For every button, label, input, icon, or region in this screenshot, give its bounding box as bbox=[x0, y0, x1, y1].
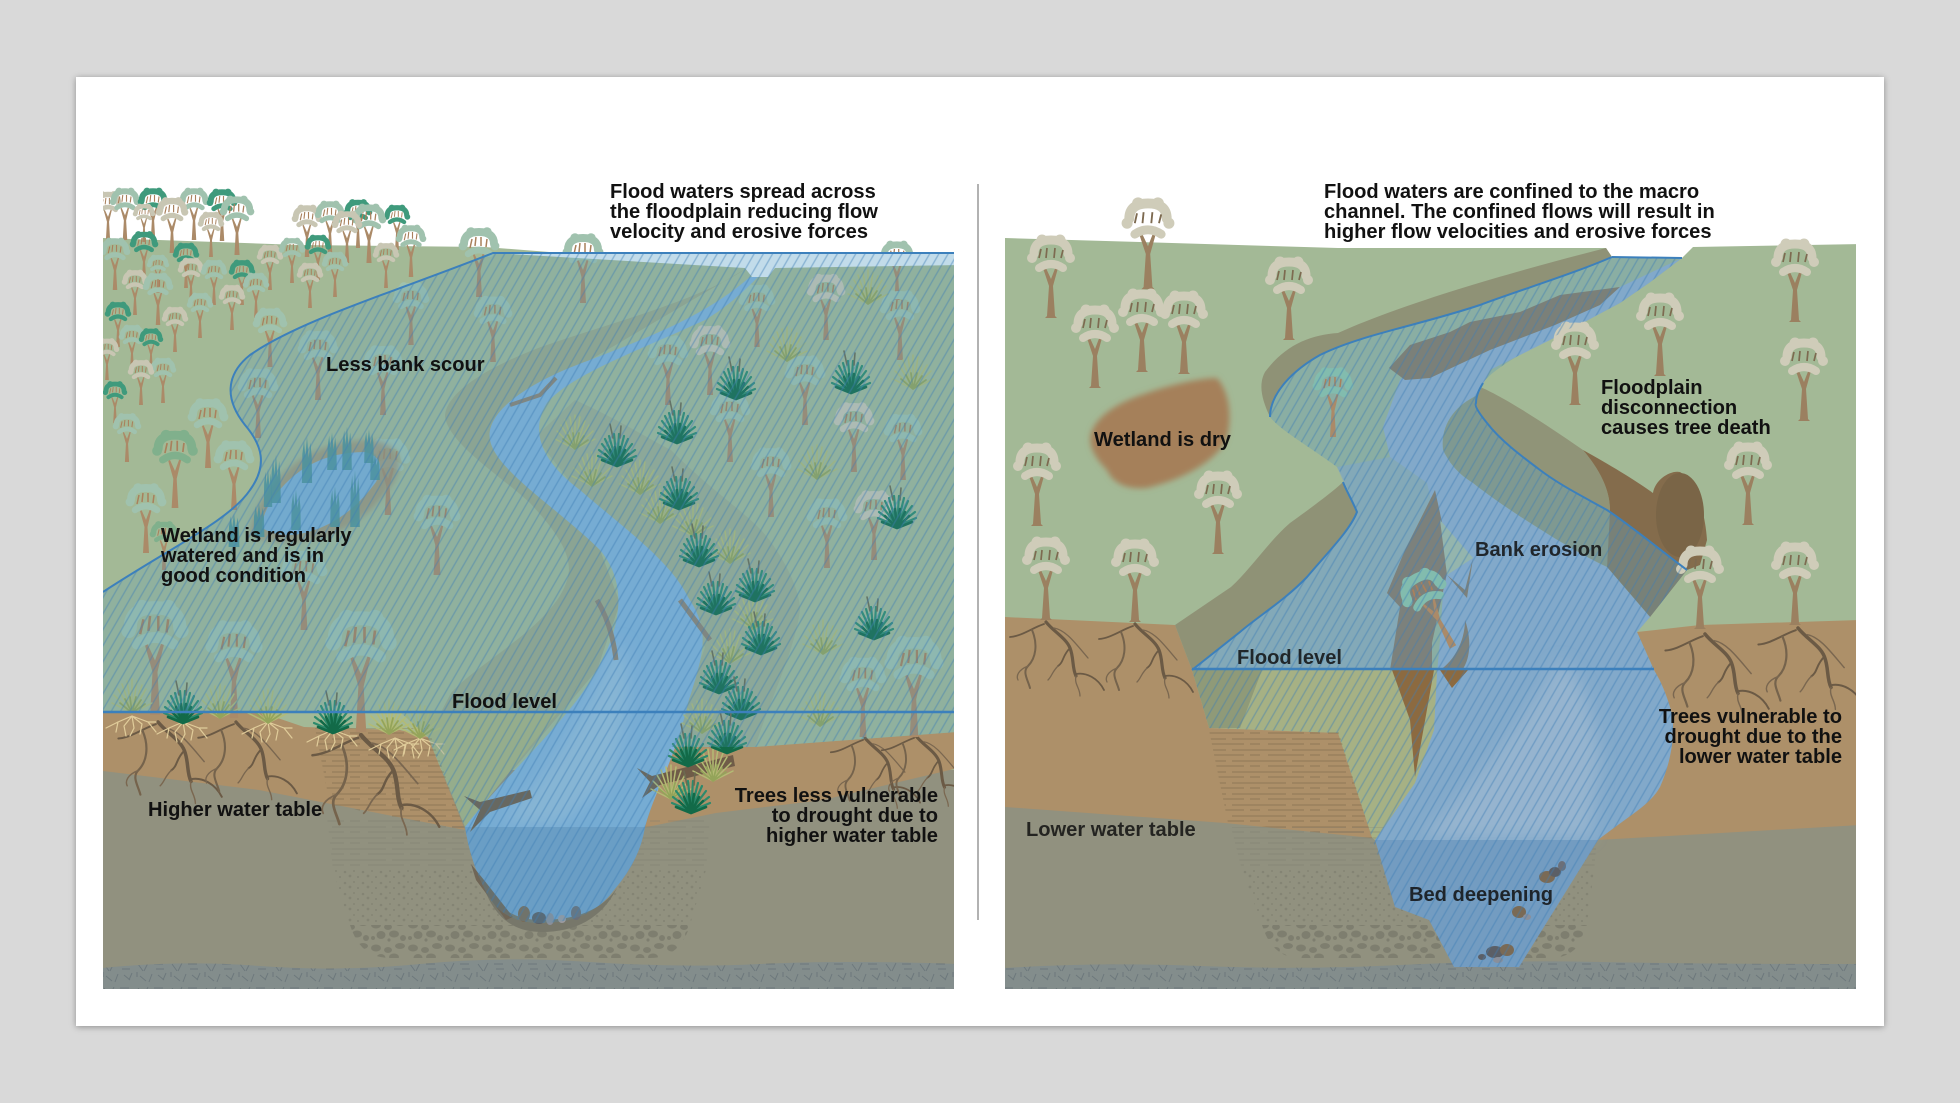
label: flood waters confined: higher flow velocities and erosive forces bbox=[1324, 221, 1712, 243]
wetland pool bbox=[250, 440, 399, 542]
cliff shade near terrace bbox=[1192, 670, 1262, 728]
bed mud rim bbox=[484, 888, 617, 932]
eroded left bank lower bbox=[1175, 482, 1357, 670]
label: wetland watered: Wetland is regularly bbox=[161, 525, 352, 547]
label: lower water table: Lower water table bbox=[1026, 819, 1196, 841]
gravel bed under channel bbox=[1231, 827, 1598, 958]
pale flow in river bbox=[511, 654, 628, 825]
roots left bbox=[106, 716, 444, 835]
label: flood waters spread: Flood waters spread across bbox=[610, 181, 876, 203]
eroded right bank bbox=[1443, 387, 1610, 567]
soil strata lines bbox=[315, 728, 465, 830]
floodplain ground bbox=[103, 238, 958, 780]
island small wedge bbox=[1447, 558, 1473, 598]
panel: confined macro channel bbox=[1005, 197, 1862, 989]
label: wetland dry: Wetland is dry bbox=[1094, 429, 1232, 451]
soil strata lines bbox=[1209, 730, 1372, 838]
flood overlay bbox=[1192, 257, 1687, 967]
infographic bbox=[103, 183, 1856, 989]
label: bank erosion: Bank erosion bbox=[1475, 539, 1602, 561]
bed rocks bbox=[1478, 861, 1566, 963]
exposed dark bar upper bbox=[1389, 287, 1620, 380]
blue left lower water bbox=[1192, 457, 1435, 670]
label: wetland watered: watered and is in bbox=[160, 545, 324, 567]
flood level line bbox=[103, 711, 958, 713]
grey subsoil bbox=[103, 770, 958, 989]
label: flood waters spread: velocity and erosive forces bbox=[610, 221, 868, 243]
floodplain trees under the flood bbox=[238, 241, 922, 630]
wetland in good condition bbox=[229, 427, 399, 547]
island pale lens bbox=[1440, 520, 1473, 575]
label: trees vulnerable: lower water table bbox=[1679, 746, 1842, 768]
bank band right of river bbox=[535, 400, 800, 747]
bedrock band bbox=[103, 959, 958, 989]
label: trees vulnerable: Trees vulnerable to bbox=[1659, 706, 1842, 728]
fallen logs bbox=[464, 378, 735, 920]
foreground tussocks bbox=[112, 679, 840, 813]
card bbox=[76, 77, 1884, 1026]
eroded left bank upper bbox=[1261, 248, 1612, 417]
wetland reeds bbox=[229, 427, 380, 547]
label: floodplain disconnection: Floodplain bbox=[1601, 377, 1703, 399]
foreground trees on the soil bbox=[121, 600, 944, 737]
label: floodplain disconnection: disconnection bbox=[1601, 397, 1737, 419]
flood extent right line bbox=[1475, 383, 1687, 570]
right soil block bbox=[1598, 620, 1860, 840]
label: trees less vulnerable: higher water table bbox=[766, 825, 938, 847]
label: flood waters confined: channel. The confined flows will result in bbox=[1324, 201, 1715, 223]
bedrock band bbox=[1005, 961, 1856, 989]
label: flood waters confined: Flood waters are confined to the macro bbox=[1324, 181, 1699, 203]
brown soil left bbox=[103, 712, 465, 830]
slump blob bbox=[1656, 473, 1704, 557]
floodplain ground bbox=[1005, 238, 1860, 830]
flood water overlay bbox=[103, 253, 958, 923]
labels: left panel bbox=[148, 181, 938, 847]
flood extent line bbox=[103, 253, 958, 592]
trees on right floodplain bbox=[1013, 197, 1828, 629]
grey subsoil bbox=[1005, 806, 1856, 968]
labels: right panel bbox=[1026, 181, 1842, 906]
flood level line bbox=[1192, 668, 1654, 670]
water channel bbox=[1375, 258, 1682, 840]
olive bank below flood level bbox=[420, 712, 558, 827]
label: flood level right: Flood level bbox=[1237, 647, 1342, 669]
label: trees vulnerable: drought due to the bbox=[1665, 726, 1842, 748]
label: wetland watered: good condition bbox=[161, 565, 306, 587]
divider bbox=[977, 184, 979, 920]
river channel bbox=[465, 277, 758, 827]
gravel bed under channel bbox=[327, 817, 710, 958]
label: trees less vulnerable: to drought due to bbox=[772, 805, 938, 827]
panel: connected floodplain bbox=[94, 188, 971, 989]
brown soil right bbox=[642, 732, 958, 828]
label: flood level left: Flood level bbox=[452, 691, 557, 713]
roots of right panel trees bbox=[1010, 622, 1862, 715]
channel water below the soil line bbox=[465, 827, 645, 923]
label: flood waters spread: the floodplain reducing flow bbox=[610, 201, 878, 223]
island brown tip bbox=[1440, 670, 1468, 688]
label: floodplain disconnection: causes tree death bbox=[1601, 417, 1771, 439]
label: higher water table: Higher water table bbox=[148, 799, 322, 821]
flood top line bbox=[1612, 257, 1682, 258]
dry wetland bbox=[1090, 378, 1230, 488]
roots right bbox=[830, 736, 954, 809]
mid channel island bbox=[1387, 490, 1447, 670]
forest trees on the hill bbox=[94, 188, 603, 570]
bank band left of river bbox=[442, 271, 742, 770]
bed rocks bbox=[518, 906, 581, 925]
pale turbulent flow bbox=[1420, 660, 1600, 838]
slumped bank brown bbox=[1583, 450, 1707, 617]
label: less bank scour: Less bank scour bbox=[326, 354, 485, 376]
label: trees less vulnerable: Trees less vulnerable bbox=[735, 785, 938, 807]
tussocks on the floodplain bbox=[555, 270, 933, 719]
island brown base bbox=[1392, 670, 1434, 777]
flooded floodplain tint bbox=[1192, 257, 1687, 670]
drowned and fallen trees bbox=[1313, 367, 1475, 658]
eroded terrace bank bbox=[1218, 670, 1437, 840]
label: bed deepening: Bed deepening bbox=[1409, 884, 1553, 906]
left soil block bbox=[1005, 617, 1372, 838]
flood extent left line bbox=[1192, 257, 1612, 670]
channel water below soil line bbox=[1375, 840, 1598, 967]
island dark crescent bbox=[1440, 620, 1469, 670]
